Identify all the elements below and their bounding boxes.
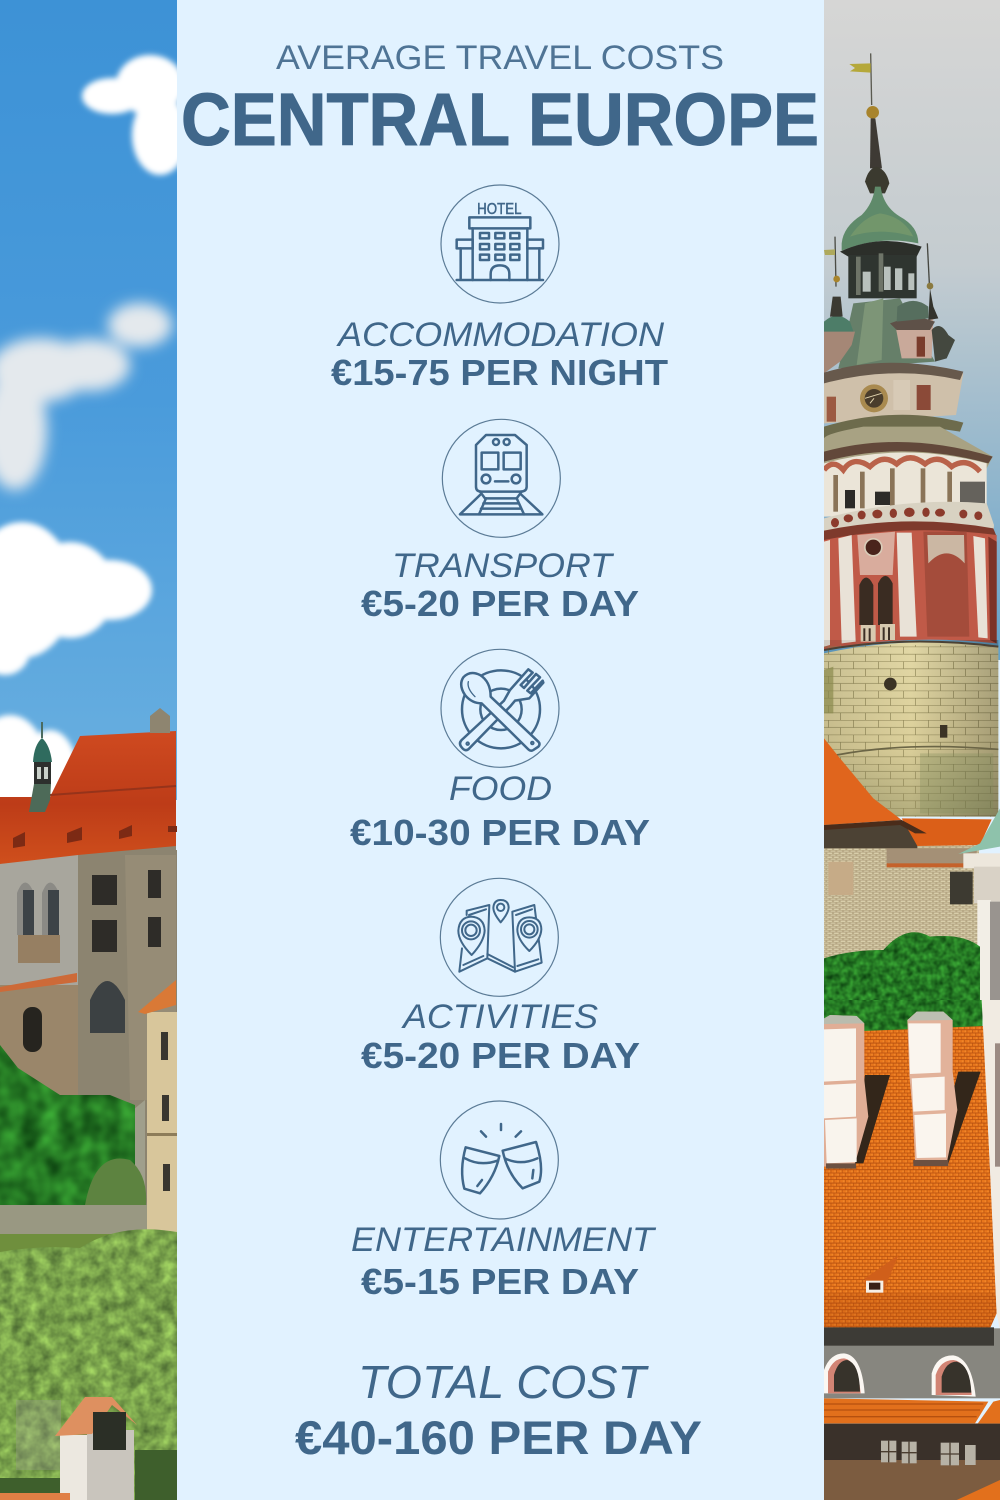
chimney	[150, 708, 170, 733]
tower body	[824, 502, 1000, 1003]
lower wall	[0, 985, 78, 1095]
price: food: €10-30 PER DAY	[350, 812, 650, 853]
price: activities: €5-20 PER DAY	[361, 1035, 640, 1076]
lawn	[0, 1234, 111, 1252]
grey wall	[824, 1328, 1000, 1398]
balustrade	[824, 502, 994, 531]
bottom roof edge	[0, 1493, 70, 1500]
square windows	[92, 870, 161, 952]
label: entertainment: ENTERTAINMENT	[351, 1221, 656, 1259]
sky	[0, 0, 177, 800]
garden hut	[55, 1397, 137, 1500]
stone base	[824, 642, 998, 817]
tower spire and lantern	[824, 53, 993, 517]
photo: left strip, castle and sky	[0, 0, 188, 1500]
label: food: FOOD	[449, 770, 552, 808]
green dome	[842, 187, 918, 251]
lower green roof	[838, 298, 935, 368]
tree canopy	[0, 1222, 177, 1500]
lantern	[848, 255, 917, 298]
arcade	[824, 452, 987, 517]
price: transport: €5-20 PER DAY	[361, 583, 639, 624]
clouds	[0, 55, 188, 825]
pale green roof and pilaster	[958, 808, 1000, 854]
castle roof	[0, 731, 176, 864]
label: activities: ACTIVITIES	[401, 998, 598, 1036]
lower building wall	[824, 823, 979, 963]
roof dormers	[13, 825, 177, 848]
price: entertainment: €5-15 PER DAY	[361, 1261, 639, 1302]
green bushes	[0, 1045, 135, 1206]
price: total cost: €40-160 PER DAY	[295, 1411, 702, 1464]
heading: average travel costs: AVERAGE TRAVEL COSTS	[276, 39, 724, 77]
large arched window	[90, 981, 125, 1033]
right pilaster	[982, 1000, 1000, 1330]
sky gradient	[824, 0, 1000, 660]
gallery roof	[824, 415, 963, 438]
icon: clinking glasses	[440, 1101, 558, 1219]
arched windows	[17, 882, 60, 963]
green bush	[824, 923, 980, 1003]
lower tiled roof	[824, 1398, 988, 1423]
castle upper wall	[0, 855, 78, 985]
icon: train	[442, 419, 560, 537]
central panel	[177, 0, 824, 1500]
icon: map with pins	[440, 878, 558, 996]
photo: right strip, castle tower and roofs	[824, 0, 1000, 1500]
retaining wall	[135, 1100, 145, 1186]
timber gallery	[824, 1423, 1000, 1500]
painted wall	[824, 530, 997, 650]
chimney left	[824, 1015, 868, 1167]
arched windows	[824, 1353, 976, 1397]
icon: hotel: HOTEL	[477, 201, 522, 218]
title: central europe: CENTRAL EUROPE	[181, 78, 819, 161]
side building	[147, 1012, 177, 1234]
chimney shadows	[853, 1075, 890, 1163]
tiled roof	[824, 1026, 997, 1328]
upper drum	[824, 373, 964, 424]
chimney right	[907, 1012, 957, 1160]
price: accommodation: €15-75 PER NIGHT	[331, 352, 668, 393]
clock	[860, 384, 888, 412]
small turrets	[824, 316, 854, 332]
orange roofs	[824, 738, 902, 825]
dark foliage	[0, 1450, 177, 1500]
dark trees behind roof	[824, 1000, 982, 1032]
roof section	[824, 1000, 1000, 1500]
icon: food	[441, 649, 559, 767]
weather vane	[871, 53, 872, 105]
label: total cost: TOTAL COST	[358, 1356, 649, 1408]
small dormer	[865, 1255, 899, 1293]
building backdrop	[0, 850, 177, 1205]
icon: hotel	[441, 185, 559, 303]
turret	[29, 722, 52, 812]
stone garden wall	[16, 1400, 61, 1470]
label: transport: TRANSPORT	[392, 547, 614, 585]
tower windows	[859, 576, 893, 625]
label: accommodation: ACCOMMODATION	[336, 316, 664, 354]
